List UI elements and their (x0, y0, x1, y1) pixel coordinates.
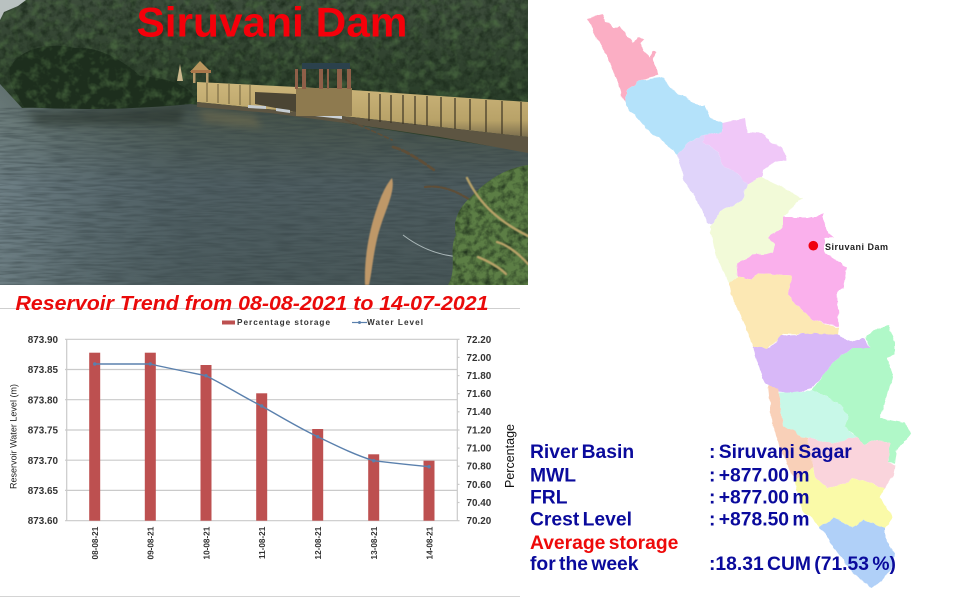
district: Kasaragod (587, 14, 658, 103)
district: Palakkad (737, 213, 847, 327)
date labels: 14-08-21 (425, 526, 434, 559)
right axis values: 72.20 (466, 335, 492, 346)
small tower at left of dam (177, 61, 211, 83)
row: FRL (530, 488, 810, 508)
right axis title: Percentage (502, 424, 517, 488)
district: Alappuzha (768, 386, 813, 480)
district shapes (587, 14, 912, 588)
date labels: 13-08-21 (370, 526, 379, 559)
date labels: 09-08-21 (147, 526, 156, 559)
combo chart: percentage storage and water level (8, 318, 517, 559)
left axis values (28, 335, 58, 527)
right axis values: 70.20 (466, 516, 492, 527)
island trees (10, 46, 195, 109)
district: Thrissur (728, 273, 839, 348)
row: crest level: Crest Level (530, 510, 632, 530)
date labels: 12-08-21 (314, 526, 323, 559)
twig across the frame (346, 120, 470, 200)
water (0, 84, 528, 285)
district: Thiruvananthapuram (820, 518, 895, 588)
right axis values: 72.00 (466, 353, 492, 364)
row: for the week: for the week (530, 554, 639, 575)
photo: Siruvani dam and reservoir (0, 0, 528, 285)
left axis values: 873.70 (28, 456, 58, 467)
row: river basin (530, 442, 852, 463)
right axis values: 71.60 (466, 389, 492, 400)
district: Ernakulam (753, 333, 870, 393)
district: Pathanamthitta (808, 437, 895, 488)
row: river basin: : Siruvani Sagar (709, 442, 852, 463)
right axis values: 71.80 (466, 371, 492, 382)
right axis values: 71.40 (466, 407, 492, 418)
row: MWL: : +877.00 m (709, 466, 810, 486)
row: for the week (530, 554, 896, 575)
label: average storage: Average storage (530, 533, 679, 554)
legend: Percentage storage (237, 318, 330, 327)
district: Malappuram (710, 177, 802, 283)
dam wall (197, 82, 528, 137)
district: Wayanad (703, 118, 787, 185)
thin white line in water (402, 234, 453, 257)
foreground bush (448, 165, 528, 285)
row: crest level: : +878.50 m (709, 510, 810, 530)
map label: Siruvani Dam: Siruvani Dam (825, 242, 888, 252)
left axis values: 873.60 (28, 516, 58, 527)
intake tower (296, 88, 352, 116)
row: for the week: :18.31 CUM (71.53 %) (709, 554, 896, 575)
legend (222, 318, 423, 327)
line: water level (93, 362, 431, 468)
forested hillside (0, 0, 528, 42)
right axis values: 71.00 (466, 444, 492, 454)
date labels (91, 526, 434, 559)
district: Kollam (795, 467, 893, 528)
district: Kottayam (779, 390, 857, 443)
right axis values: 70.60 (466, 480, 492, 491)
date labels: 11-08-21 (258, 526, 267, 559)
right axis values: 70.80 (466, 462, 492, 473)
grass plume (365, 178, 393, 285)
left axis values: 873.90 (28, 335, 58, 346)
left axis values: 873.65 (28, 486, 58, 497)
district: Kozhikode (677, 135, 748, 225)
district: Idukki (812, 325, 912, 463)
row: river basin: River Basin (530, 442, 634, 463)
row: MWL: MWL (530, 466, 576, 486)
row: FRL: FRL (530, 488, 568, 508)
dam location marker (808, 241, 818, 250)
right axis values: 70.40 (466, 498, 492, 509)
date labels: 08-08-21 (91, 526, 100, 559)
right axis values: 71.20 (466, 425, 492, 436)
right axis values (466, 335, 492, 527)
row: MWL (530, 466, 810, 486)
chart heading: Reservoir Trend from 08-08-2021 to 14-07-2021 (16, 293, 489, 315)
legend: Water Level (367, 318, 423, 327)
left axis values: 873.75 (28, 426, 58, 437)
bars: percentage storage (89, 353, 434, 521)
date labels: 10-08-21 (202, 526, 211, 559)
left axis title: Reservoir Water Level (m) (8, 384, 18, 489)
map of Kerala districts (587, 14, 912, 588)
dam reflection (197, 110, 262, 128)
district: Kannur (625, 77, 723, 155)
left axis values: 873.85 (28, 365, 58, 376)
row: crest level (530, 510, 810, 530)
panel: reservoir details (530, 442, 896, 575)
row: FRL: : +877.00 m (709, 488, 810, 508)
left axis values: 873.80 (28, 395, 58, 406)
sky corner (0, 0, 26, 20)
